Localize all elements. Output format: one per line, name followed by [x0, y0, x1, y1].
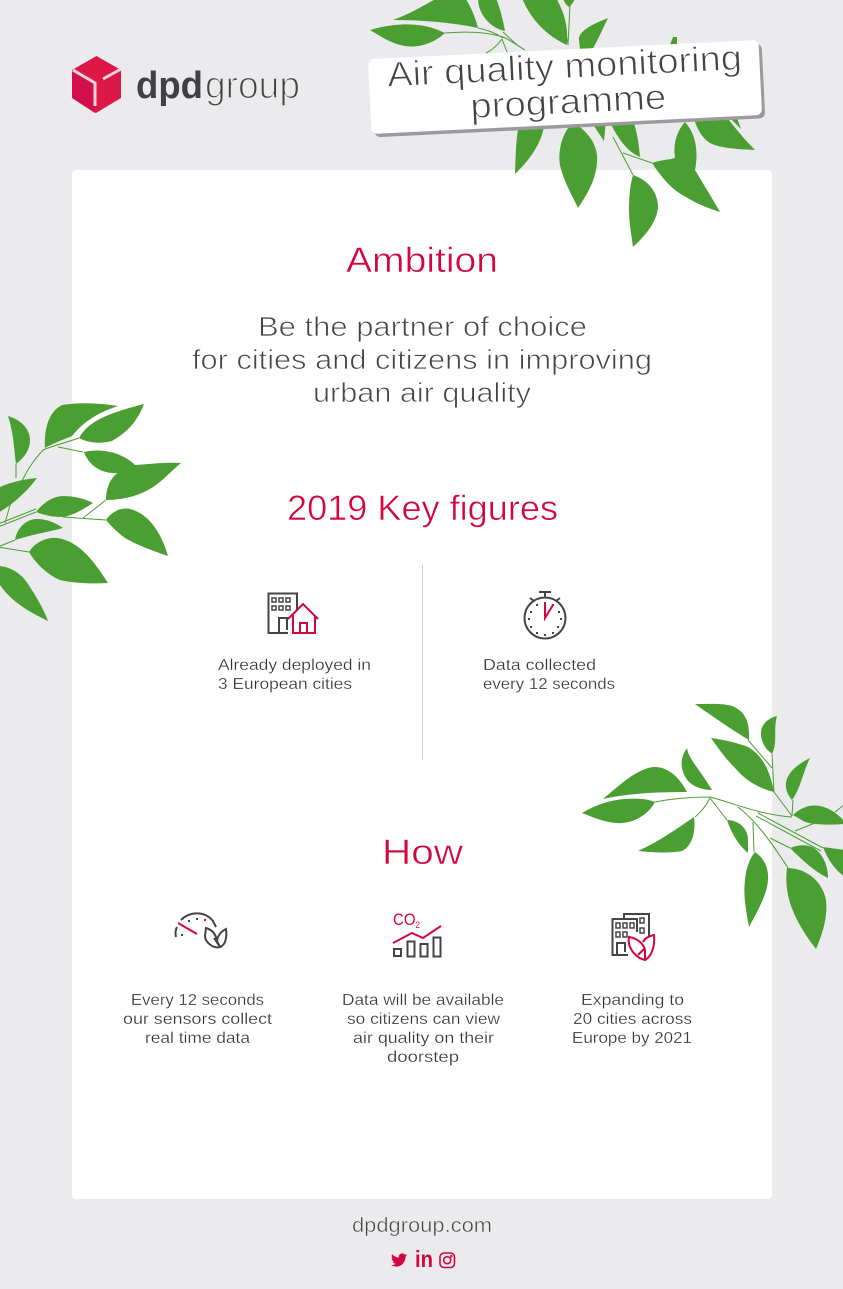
label: Data will be available: [342, 992, 504, 1009]
label: real time data: [145, 1030, 250, 1047]
text block: ambition statement: for cities and citizens in improving: [192, 344, 652, 375]
icon: city and leaves: [612, 914, 654, 960]
label: 20 cities across: [573, 1011, 692, 1028]
how column: expansion: [572, 914, 692, 1047]
icon: red parcel cube: [72, 56, 121, 113]
title text: programme: [469, 78, 667, 126]
label: Already deployed in: [218, 657, 371, 674]
label: [572, 992, 692, 1047]
icon: stopwatch: [524, 592, 566, 638]
icon: gauge and leaves: [176, 913, 226, 947]
label: Europe by 2021: [572, 1030, 692, 1047]
icon: CO2 chart: 2: [416, 920, 420, 930]
title text: [386, 38, 744, 130]
label: Every 12 seconds: [131, 992, 264, 1009]
icon: building and house: [268, 594, 318, 633]
label: [483, 657, 615, 693]
text block: ambition statement: [192, 311, 652, 408]
panel: white content card: [72, 170, 772, 1199]
key figure: data frequency: [483, 592, 615, 693]
logo: dpdgroup: group: [205, 65, 300, 107]
label: so citizens can view: [347, 1011, 500, 1028]
label: Expanding to: [581, 992, 684, 1009]
how column: sensors: [123, 913, 273, 1047]
illustration: top leaves: [370, 0, 755, 247]
label: [218, 657, 371, 693]
text block: ambition statement: urban air quality: [313, 377, 531, 408]
illustration: right leaves: [582, 704, 843, 949]
label: [123, 992, 273, 1047]
title banner: [368, 37, 765, 138]
label: Data collected: [483, 657, 596, 674]
how column: public data: [342, 910, 504, 1066]
label: doorstep: [387, 1049, 459, 1066]
heading: How: How: [382, 833, 464, 872]
icon: CO2 chart: CO: [393, 910, 418, 929]
footer: website: dpdgroup.com: [352, 1215, 492, 1237]
logo: dpdgroup: [72, 56, 300, 113]
label: every 12 seconds: [483, 676, 615, 693]
label: air quality on their: [353, 1030, 495, 1047]
icon: twitter: [391, 1254, 407, 1267]
illustration: left leaves: [0, 403, 181, 621]
heading: Ambition: Ambition: [346, 241, 498, 280]
icon: instagram: [440, 1253, 454, 1268]
icon: linkedin: in: [415, 1246, 433, 1272]
icon: CO2 chart: [393, 910, 441, 956]
text block: ambition statement: Be the partner of choice: [258, 311, 587, 342]
title text: Air quality monitoring: [386, 38, 743, 95]
label: our sensors collect: [123, 1011, 273, 1028]
logo wordmark: dpd: [136, 65, 203, 107]
label: [342, 992, 504, 1066]
key figure: deployed cities: [218, 594, 371, 693]
footer: social icons: [391, 1246, 454, 1272]
divider: [422, 565, 424, 760]
label: 3 European cities: [218, 676, 352, 693]
heading: 2019 Key figures: 2019 Key figures: [287, 489, 558, 528]
